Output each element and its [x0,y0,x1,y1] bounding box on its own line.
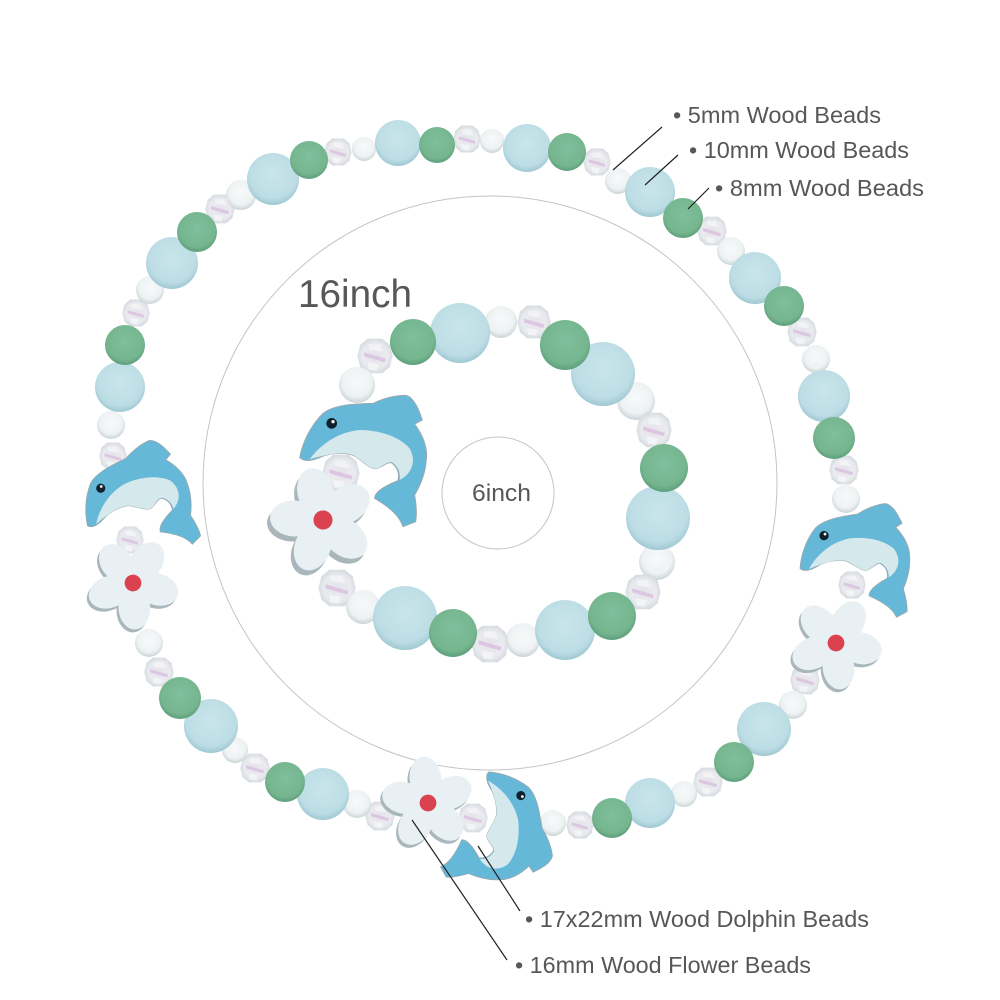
leader lines [412,127,709,960]
label: 8mm wood beads: • 8mm Wood Beads [715,175,924,201]
necklace beads [95,120,866,838]
necklace dolphin and flower: left [64,433,211,652]
label: dolphin beads: • 17x22mm Wood Dolphin Beads [525,906,869,932]
label: 10mm wood beads: • 10mm Wood Beads [689,137,909,163]
16 inch size circle [203,196,777,770]
necklace dolphin and flower: bottom [372,752,555,887]
bracelet flower [252,454,391,591]
label: 5mm wood beads: • 5mm Wood Beads [673,102,881,128]
necklace dolphin and flower: right [768,501,917,711]
size label: 6inch: 6inch [472,480,531,507]
size label: 16inch: 16inch [298,273,412,316]
bracelet dolphin [300,395,427,527]
6 inch size circle [442,437,554,549]
bracelet beads [318,303,690,662]
label: flower beads: • 16mm Wood Flower Beads [515,952,811,978]
